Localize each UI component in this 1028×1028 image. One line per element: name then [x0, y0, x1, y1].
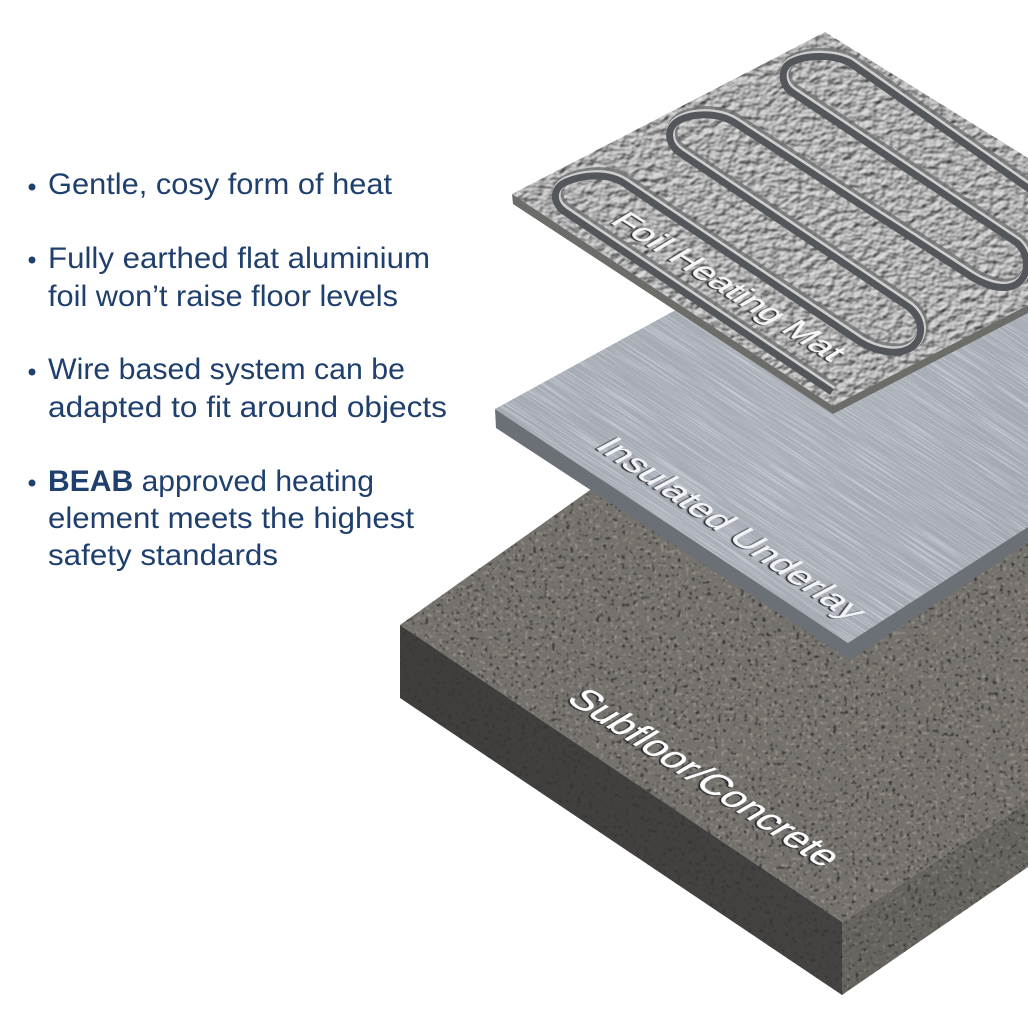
bullet: BEAB approved: BEAB approved heating — [48, 465, 374, 498]
bullet: BEAB approved: element meets the highest — [48, 502, 415, 535]
bullet: flat foil — [28, 242, 430, 313]
mat edge — [512, 194, 1028, 414]
layer: insulated underlay — [495, 305, 1028, 660]
concrete left side — [395, 620, 845, 1000]
bullet: flat foil: foil won’t raise floor levels — [48, 280, 398, 313]
concrete right side — [840, 795, 1028, 1000]
bullet: wire system — [28, 353, 447, 424]
bullet: gentle heat: Gentle, cosy form of heat — [48, 168, 393, 201]
layer: foil heating mat — [505, 25, 1028, 415]
label: Foil Heating Mat: Foil Heating Mat — [603, 207, 855, 366]
heating wire — [555, 53, 1028, 392]
bullet: wire system: Wire based system can be — [48, 353, 405, 386]
bullet: wire system: adapted to fit around objects — [48, 391, 447, 424]
label: Insulated Underlay: Insulated Underlay — [587, 432, 877, 626]
layer: subfloor concrete slab — [400, 480, 1028, 995]
underlay top surface — [495, 305, 1028, 643]
concrete top surface — [400, 480, 1028, 922]
bullet: flat foil: Fully earthed flat aluminium — [48, 242, 430, 275]
label: Subfloor/Concrete: Subfloor/Concrete — [557, 683, 851, 873]
bullet: BEAB approved: safety standards — [48, 539, 278, 572]
underlay side edge — [495, 409, 1028, 660]
bullet: BEAB approved — [28, 465, 415, 572]
mat textured surface — [505, 25, 1028, 415]
bullet list — [28, 168, 447, 572]
